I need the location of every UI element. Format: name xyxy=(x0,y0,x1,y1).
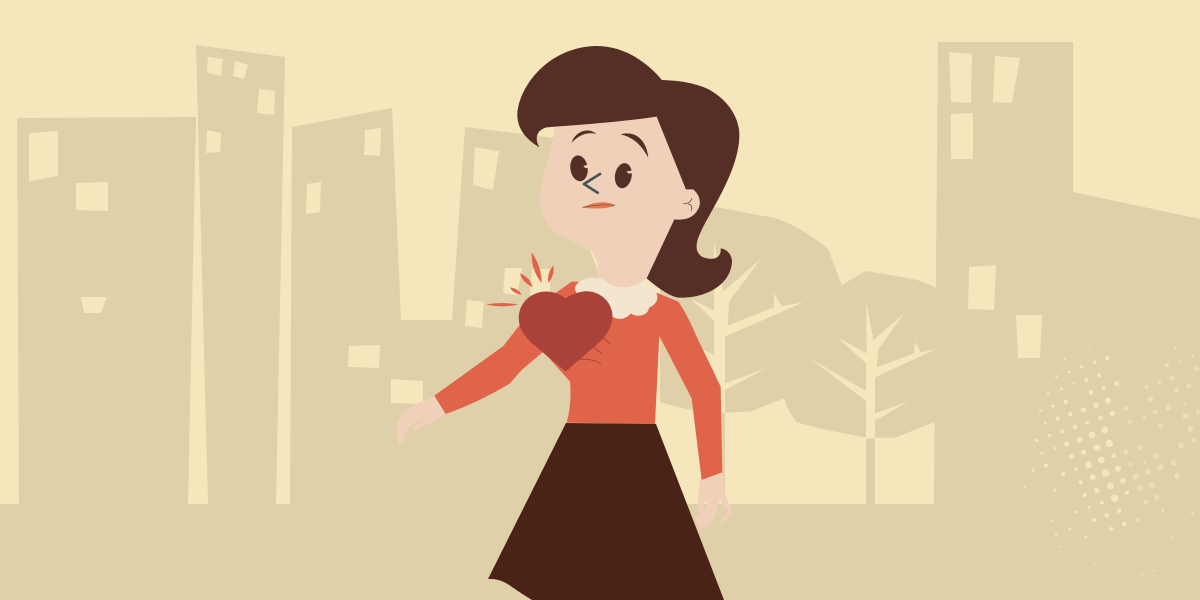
trees xyxy=(660,207,938,505)
heart xyxy=(519,291,612,372)
front hair xyxy=(517,46,687,189)
right hand xyxy=(695,473,732,529)
tree trunks below canopy xyxy=(722,413,875,505)
sweater wrinkles xyxy=(580,337,611,364)
collar xyxy=(575,278,657,319)
left eye highlight xyxy=(583,164,588,168)
mouth line xyxy=(583,205,615,207)
sweater xyxy=(434,282,722,480)
faint halftone noise xyxy=(1084,337,1200,593)
left eye xyxy=(569,154,589,182)
tree canopies xyxy=(660,207,938,438)
woman figure xyxy=(397,46,739,600)
skirt xyxy=(488,423,724,600)
right eyebrow xyxy=(621,133,648,158)
tree branches xyxy=(690,242,803,413)
heart with pain marks xyxy=(486,252,612,372)
pain rays xyxy=(486,252,554,306)
back hair xyxy=(647,80,739,298)
face and neck xyxy=(540,116,700,287)
right eye highlight xyxy=(627,171,632,173)
left hand xyxy=(397,397,445,444)
building windows xyxy=(29,52,1042,404)
halftone dots xyxy=(1023,337,1200,593)
right eye xyxy=(613,162,634,190)
ear detail xyxy=(683,198,692,211)
left eyebrow xyxy=(572,131,596,143)
nose xyxy=(584,173,601,193)
mouth xyxy=(582,202,616,208)
facial features xyxy=(569,131,692,211)
